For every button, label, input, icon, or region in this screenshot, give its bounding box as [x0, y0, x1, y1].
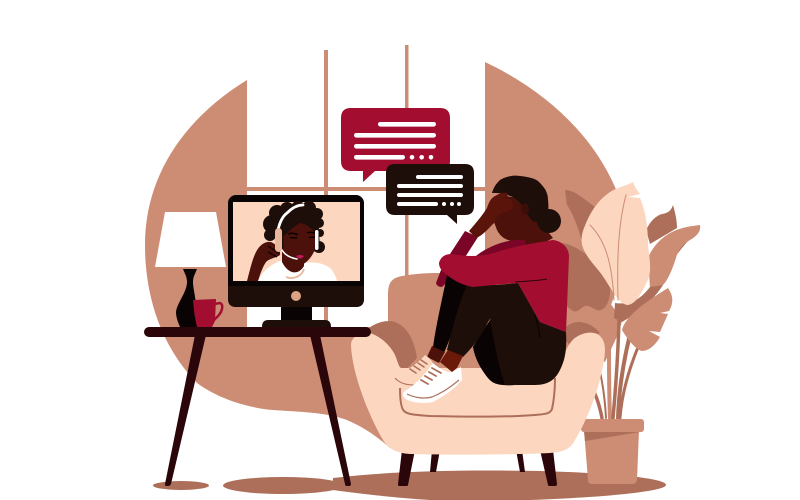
raised sleeve — [450, 231, 478, 262]
chair front legs — [398, 450, 557, 486]
plant — [562, 182, 700, 484]
leaf: dark stem leaf — [614, 285, 663, 322]
sweater and arm — [439, 240, 569, 332]
speech bubble: dark — [386, 164, 474, 224]
fingers — [268, 246, 279, 257]
headset — [278, 205, 303, 259]
leaf: right terracotta — [648, 225, 700, 288]
side table — [144, 327, 371, 486]
arm and hand — [247, 242, 280, 281]
lamp shade — [155, 212, 226, 267]
mug — [193, 299, 222, 327]
desk lamp — [155, 212, 226, 327]
woman sitting — [394, 176, 569, 403]
eyes and brows — [288, 232, 316, 238]
screen — [233, 202, 360, 281]
left table leg — [165, 335, 206, 486]
hair bun — [537, 209, 561, 233]
back shoe — [394, 355, 434, 386]
leaf: large dark — [562, 243, 610, 311]
back ankle — [427, 346, 445, 363]
hips and thigh — [473, 283, 566, 385]
therapist on screen — [247, 201, 337, 281]
monitor base — [262, 320, 331, 327]
shoulder shadow — [476, 240, 527, 258]
armchair — [351, 262, 605, 486]
leaf: top right dark — [646, 205, 677, 244]
floor shadows — [153, 471, 666, 500]
leaf veins — [590, 195, 626, 300]
shirt — [258, 260, 337, 281]
chair body — [351, 333, 605, 455]
monitor frame — [228, 195, 364, 307]
hair — [492, 176, 548, 222]
back arm sleeve — [436, 270, 449, 287]
right table leg — [310, 335, 351, 486]
lips — [296, 255, 304, 258]
headset ear pads — [275, 228, 318, 252]
front ankle — [440, 350, 463, 372]
neck — [282, 248, 304, 272]
monitor chin — [228, 286, 364, 307]
stems — [594, 232, 695, 418]
leaf: large peach — [582, 182, 650, 305]
power button — [291, 291, 301, 301]
chair back legs — [430, 450, 525, 472]
computer monitor — [228, 195, 364, 327]
background blob — [145, 62, 624, 448]
front shoe — [403, 363, 462, 403]
window — [247, 0, 485, 327]
seat cushion line — [400, 378, 555, 417]
left arm shadow — [362, 321, 417, 378]
collar shadow — [286, 269, 304, 278]
lamp vase — [176, 269, 197, 327]
right arm shadow — [560, 322, 600, 345]
ear — [521, 204, 529, 214]
chair backrest — [388, 262, 604, 400]
back leg — [433, 275, 470, 353]
curly hair — [263, 201, 325, 258]
pot — [581, 419, 644, 484]
neck and face — [494, 195, 553, 252]
face — [283, 223, 317, 266]
table top — [144, 327, 371, 337]
leaf: lower right — [622, 288, 672, 351]
leaf: back left — [565, 190, 595, 247]
sleeve crease — [515, 279, 547, 282]
monitor stand — [281, 305, 312, 322]
speech bubble: red — [341, 108, 450, 182]
leaf: lower left terracotta — [568, 300, 622, 362]
thigh crease — [535, 315, 540, 338]
inner thigh shadow — [473, 320, 505, 385]
front leg — [447, 285, 498, 357]
raised hand — [469, 193, 513, 238]
